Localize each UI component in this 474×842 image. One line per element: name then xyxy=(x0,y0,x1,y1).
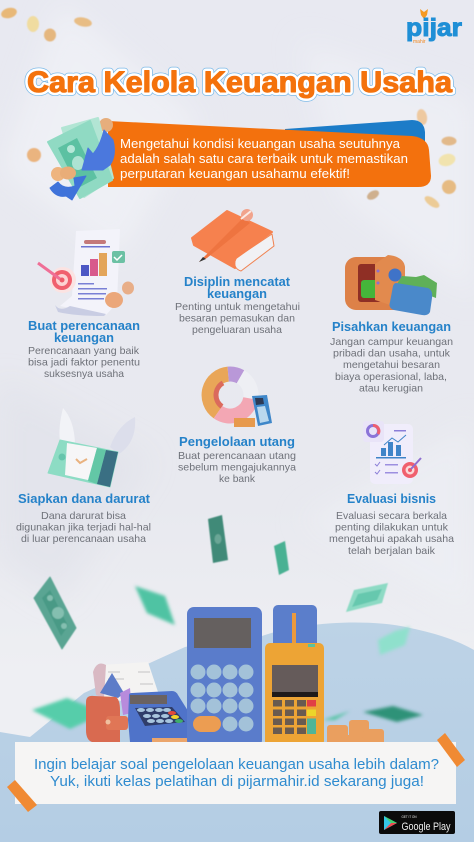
item: Siapkan dana darurat xyxy=(16,408,151,545)
illustration: card terminal xyxy=(128,691,204,743)
heading: Siapkan dana darurat xyxy=(18,492,151,506)
description: pribadi dan usaha, untuk xyxy=(333,348,451,360)
description: atau kerugian xyxy=(359,382,423,394)
description: Evaluasi secara berkala xyxy=(336,510,447,522)
call to action card xyxy=(15,742,456,804)
description: digunakan jika terjadi hal-hal xyxy=(16,522,151,534)
description: besaran pemasukan dan xyxy=(179,312,295,324)
heading xyxy=(28,319,140,345)
icon: report with target xyxy=(38,229,134,316)
logo: pijar mahir: pijar xyxy=(406,14,462,42)
description: penting dilakukan untuk xyxy=(335,522,449,534)
flying banknotes xyxy=(32,515,423,729)
item: Disiplin mencatat keuangan xyxy=(175,209,300,336)
illustration: coin stacks xyxy=(327,720,384,746)
description: suksesnya usaha xyxy=(44,368,124,380)
item: Pengelolaan utang xyxy=(178,374,296,485)
tape right xyxy=(437,733,465,767)
description xyxy=(329,510,454,557)
description: Buat perencanaan utang xyxy=(178,450,296,462)
icon: notebook and pencil xyxy=(192,209,274,271)
description: pengeluaran usaha xyxy=(192,324,282,336)
intro banner: perputaran keuangan usahamu efektif! xyxy=(120,167,350,181)
description: mengetahui besaran xyxy=(343,359,440,371)
title: Cara Kelola Keuangan Usaha xyxy=(27,66,452,99)
description: ke bank xyxy=(219,473,256,485)
icon: donut chart and calculator xyxy=(209,374,272,427)
badge: google play xyxy=(379,811,455,834)
description: Perencanaan yang baik xyxy=(28,345,140,357)
icon: money with arrows xyxy=(48,118,114,200)
heading: Evaluasi bisnis xyxy=(347,492,436,506)
logo: pijar mahir: mahir xyxy=(413,39,426,45)
description xyxy=(16,510,151,545)
description: sebelum mengajukannya xyxy=(178,462,296,474)
illustration: receipt xyxy=(93,662,160,702)
description: Jangan campur keuangan xyxy=(330,336,453,348)
intro banner: adalah salah satu cara terbaik untuk memastikan xyxy=(120,152,408,166)
icon: safe and wallet xyxy=(345,255,437,315)
falling coins top xyxy=(0,6,457,210)
description: biaya operasional, laba, xyxy=(335,371,447,383)
description xyxy=(178,450,296,485)
heading: Disiplin mencatat xyxy=(184,275,291,289)
heading xyxy=(184,275,291,301)
icon: evaluation report xyxy=(363,421,421,484)
illustration: payment machine xyxy=(265,605,324,746)
item: Evaluasi bisnis xyxy=(329,421,454,557)
description xyxy=(175,301,300,336)
description: di luar perencanaan usaha xyxy=(21,533,146,545)
heading: Pisahkan keuangan xyxy=(332,320,451,334)
description: Penting untuk mengetahui xyxy=(175,301,300,313)
heading: Pengelolaan utang xyxy=(179,435,295,449)
badge: google play: Google Play xyxy=(402,821,451,833)
intro banner xyxy=(108,120,431,187)
description xyxy=(330,336,453,394)
heading: keuangan xyxy=(207,287,267,301)
title: Cara Kelola Keuangan Usaha xyxy=(27,66,452,99)
badge: google play: GET IT ON xyxy=(402,814,417,819)
heading: keuangan xyxy=(54,331,114,345)
title: Cara Kelola Keuangan Usaha xyxy=(27,66,452,99)
call to action card: Yuk, ikuti kelas pelatihan di pijarmahir.id sekarang juga! xyxy=(50,774,424,790)
heading: Buat perencanaan xyxy=(28,319,140,333)
illustration: calculator xyxy=(187,607,262,747)
item: Buat perencanaan keuangan xyxy=(28,229,140,380)
illustration: wallet xyxy=(86,673,132,742)
description: mengetahui apakah usaha xyxy=(329,533,454,545)
background hill xyxy=(0,622,474,842)
description: bisa jadi faktor penentu xyxy=(28,356,140,368)
call to action card: Ingin belajar soal pengelolaan keuangan usaha lebih dalam? xyxy=(34,757,439,773)
tape left xyxy=(7,780,37,812)
icon: winged money xyxy=(48,408,135,487)
description: Dana darurat bisa xyxy=(41,510,126,522)
intro banner: Mengetahui kondisi keuangan usaha seutuhnya xyxy=(120,137,400,151)
description xyxy=(28,345,140,380)
item: Pisahkan keuangan xyxy=(330,255,453,394)
description: telah berjalan baik xyxy=(348,545,436,557)
